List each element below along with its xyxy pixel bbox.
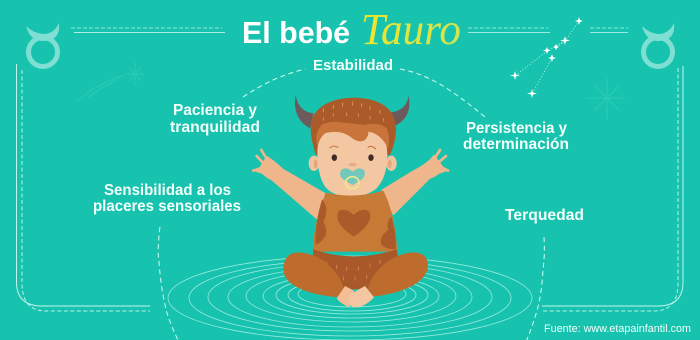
faint shooting star: [77, 62, 144, 102]
label: Persistencia y determinación: Persistencia y: [466, 120, 567, 137]
eyes and brows: [332, 154, 337, 161]
label: Estabilidad: Estabilidad: [313, 57, 393, 74]
heart: [337, 210, 370, 237]
label: Sensibilidad a los placeres sensoriales: [93, 182, 241, 215]
faint asterisk star: [586, 78, 625, 120]
hood fur ticks: [323, 102, 383, 122]
ears: [309, 156, 319, 171]
label: Paciencia y tranquilidad: [170, 102, 260, 136]
diaper: [313, 249, 398, 290]
title: El bebé: [242, 16, 350, 50]
source credit: Fuente: www.etapainfantil.com: [544, 323, 691, 335]
right arm: [382, 150, 448, 215]
bodysuit: [313, 191, 397, 252]
horns: [295, 95, 313, 128]
nose: [348, 163, 357, 166]
icon: left Taurus symbol: [26, 23, 59, 66]
decorative frame: [16, 28, 683, 311]
hood: [311, 98, 396, 155]
pacifier: [340, 168, 365, 185]
bodysuit spots: [316, 199, 396, 249]
label: Paciencia y tranquilidad: Paciencia y: [173, 102, 257, 119]
label: Sensibilidad a los placeres sensoriales: placeres sensoriales: [93, 198, 241, 215]
label: Sensibilidad a los placeres sensoriales: Sensibilidad a los: [104, 182, 231, 199]
constellation: [510, 17, 583, 98]
illustration: baby in bull costume: [253, 95, 448, 307]
left leg: [283, 252, 344, 297]
icon: right Taurus symbol: [642, 23, 674, 66]
feet: [337, 286, 354, 307]
ripple rings under the baby: [168, 256, 532, 340]
hair: [316, 122, 389, 148]
label: Terquedad: Terquedad: [505, 207, 584, 224]
right leg: [368, 252, 428, 296]
left arm: [253, 150, 325, 219]
diaper fur ticks: [327, 260, 380, 281]
label: Persistencia y determinación: [463, 120, 569, 153]
dashed orbit around the baby: [158, 69, 544, 340]
label: Paciencia y tranquilidad: tranquilidad: [170, 119, 260, 136]
label: Persistencia y determinación: determinación: [463, 136, 569, 153]
face: [317, 127, 387, 197]
title: Tauro: [361, 5, 461, 54]
title: [242, 5, 461, 54]
